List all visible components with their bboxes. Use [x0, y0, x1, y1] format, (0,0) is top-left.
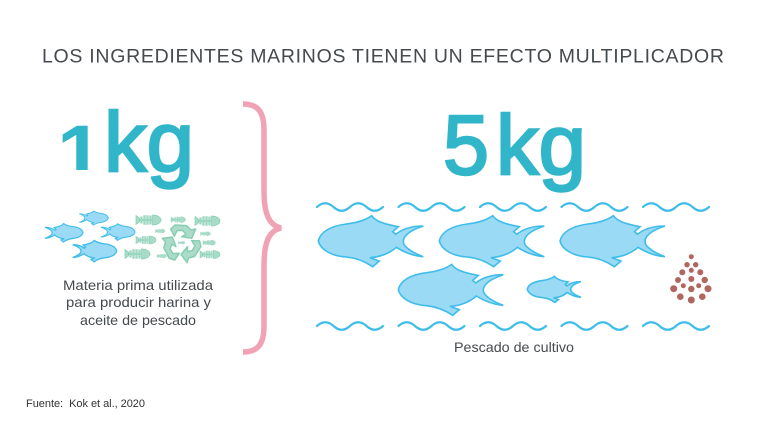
icon: recycling arrows: [159, 225, 203, 265]
title: LOS INGREDIENTES MARINOS TIENEN UN EFECTO MULTIPLICADOR: [42, 46, 724, 68]
heading: 1kg: 1: [57, 108, 103, 196]
text: farmed fish caption: Pescado de cultivo: [454, 340, 574, 355]
text: raw material caption: aceite de pescado: [80, 313, 196, 328]
heading: 1kg: [62, 108, 190, 190]
small farmed fish: [527, 276, 581, 302]
text: raw material caption: para producir harina y: [66, 295, 211, 310]
heading: 5kg: 5: [443, 98, 489, 192]
heading: 5kg: [443, 98, 586, 192]
text: raw material caption: [63, 278, 213, 328]
icon: fish bones: [125, 215, 220, 259]
curly brace: [243, 104, 281, 352]
waves: top row: [317, 203, 709, 211]
text: raw material caption: Materia prima utilizada: [63, 278, 213, 293]
waves: bottom row: [317, 322, 709, 330]
large farmed fish group: [318, 216, 665, 315]
heading: 1kg: kg: [104, 95, 194, 189]
heading: 5kg: kg: [496, 98, 586, 192]
icon: school of small fish: [45, 211, 135, 262]
source note: Fuente: Kok et al., 2020: [26, 398, 145, 410]
icon: feed pellets: [670, 254, 712, 304]
